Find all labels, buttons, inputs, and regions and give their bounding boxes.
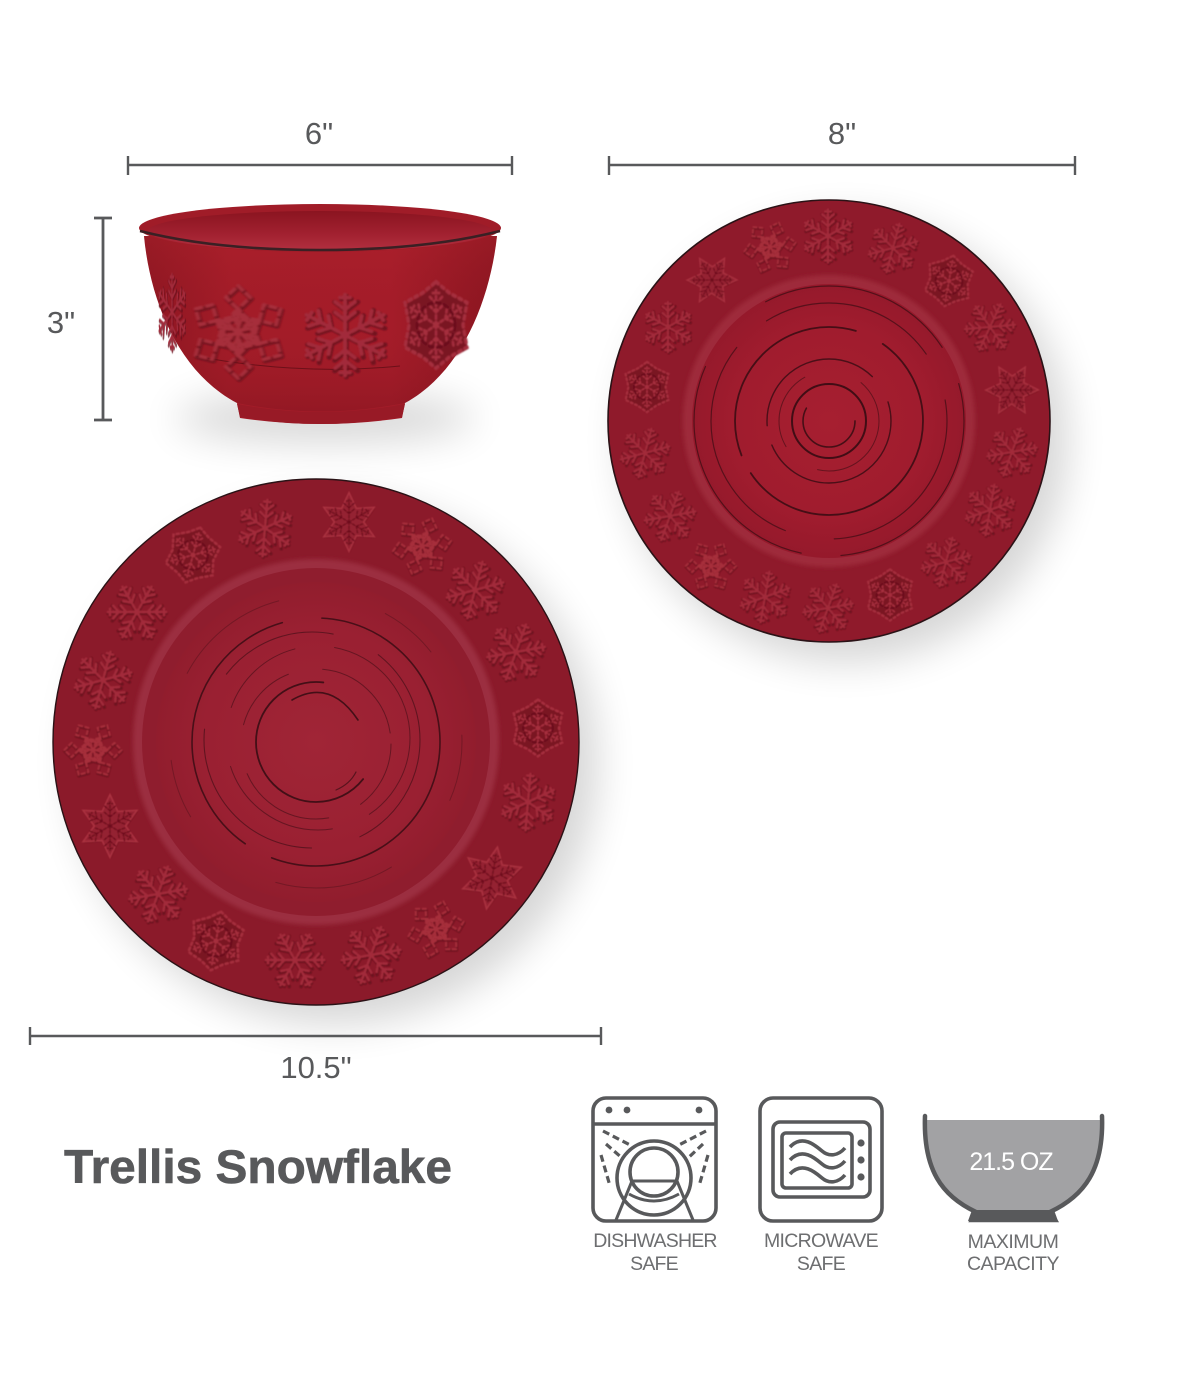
label: maximum capacity: MAXIMUM [968, 1231, 1058, 1253]
plate rings [170, 596, 462, 888]
icon: dishwasher safe [593, 1098, 716, 1221]
dimension: dinner plate width 10.5 inches [30, 1027, 601, 1085]
dimension: salad plate width 8 inches [609, 116, 1075, 175]
label: maximum capacity: CAPACITY [967, 1253, 1060, 1275]
dimension: bowl height 3 inches [47, 218, 112, 420]
icon: bowl maximum capacity [925, 1116, 1102, 1221]
dimension: salad plate width 8 inches: 8" [828, 116, 856, 151]
snowflakes on bowl [157, 274, 468, 380]
bowl photo [139, 204, 501, 442]
dimension: bowl width 6 inches: 6" [305, 116, 333, 151]
plate rings [694, 286, 964, 556]
label: dishwasher safe: DISHWASHER [593, 1230, 717, 1252]
dinner plate photo [53, 479, 597, 1024]
label: microwave safe: SAFE [797, 1253, 846, 1275]
icon: bowl maximum capacity: 21.5 OZ [969, 1148, 1053, 1176]
dimension: dinner plate width 10.5 inches: 10.5" [280, 1050, 352, 1085]
title: Trellis Snowflake [64, 1140, 452, 1193]
dimension: bowl height 3 inches: 3" [47, 305, 75, 340]
label: microwave safe: MICROWAVE [764, 1230, 879, 1252]
plate snowflakes [54, 493, 563, 1001]
salad plate photo [608, 200, 1067, 662]
icon: microwave safe [760, 1098, 882, 1221]
dimension: bowl width 6 inches [128, 116, 512, 175]
plate snowflakes [614, 210, 1046, 641]
label: dishwasher safe: SAFE [630, 1253, 679, 1275]
